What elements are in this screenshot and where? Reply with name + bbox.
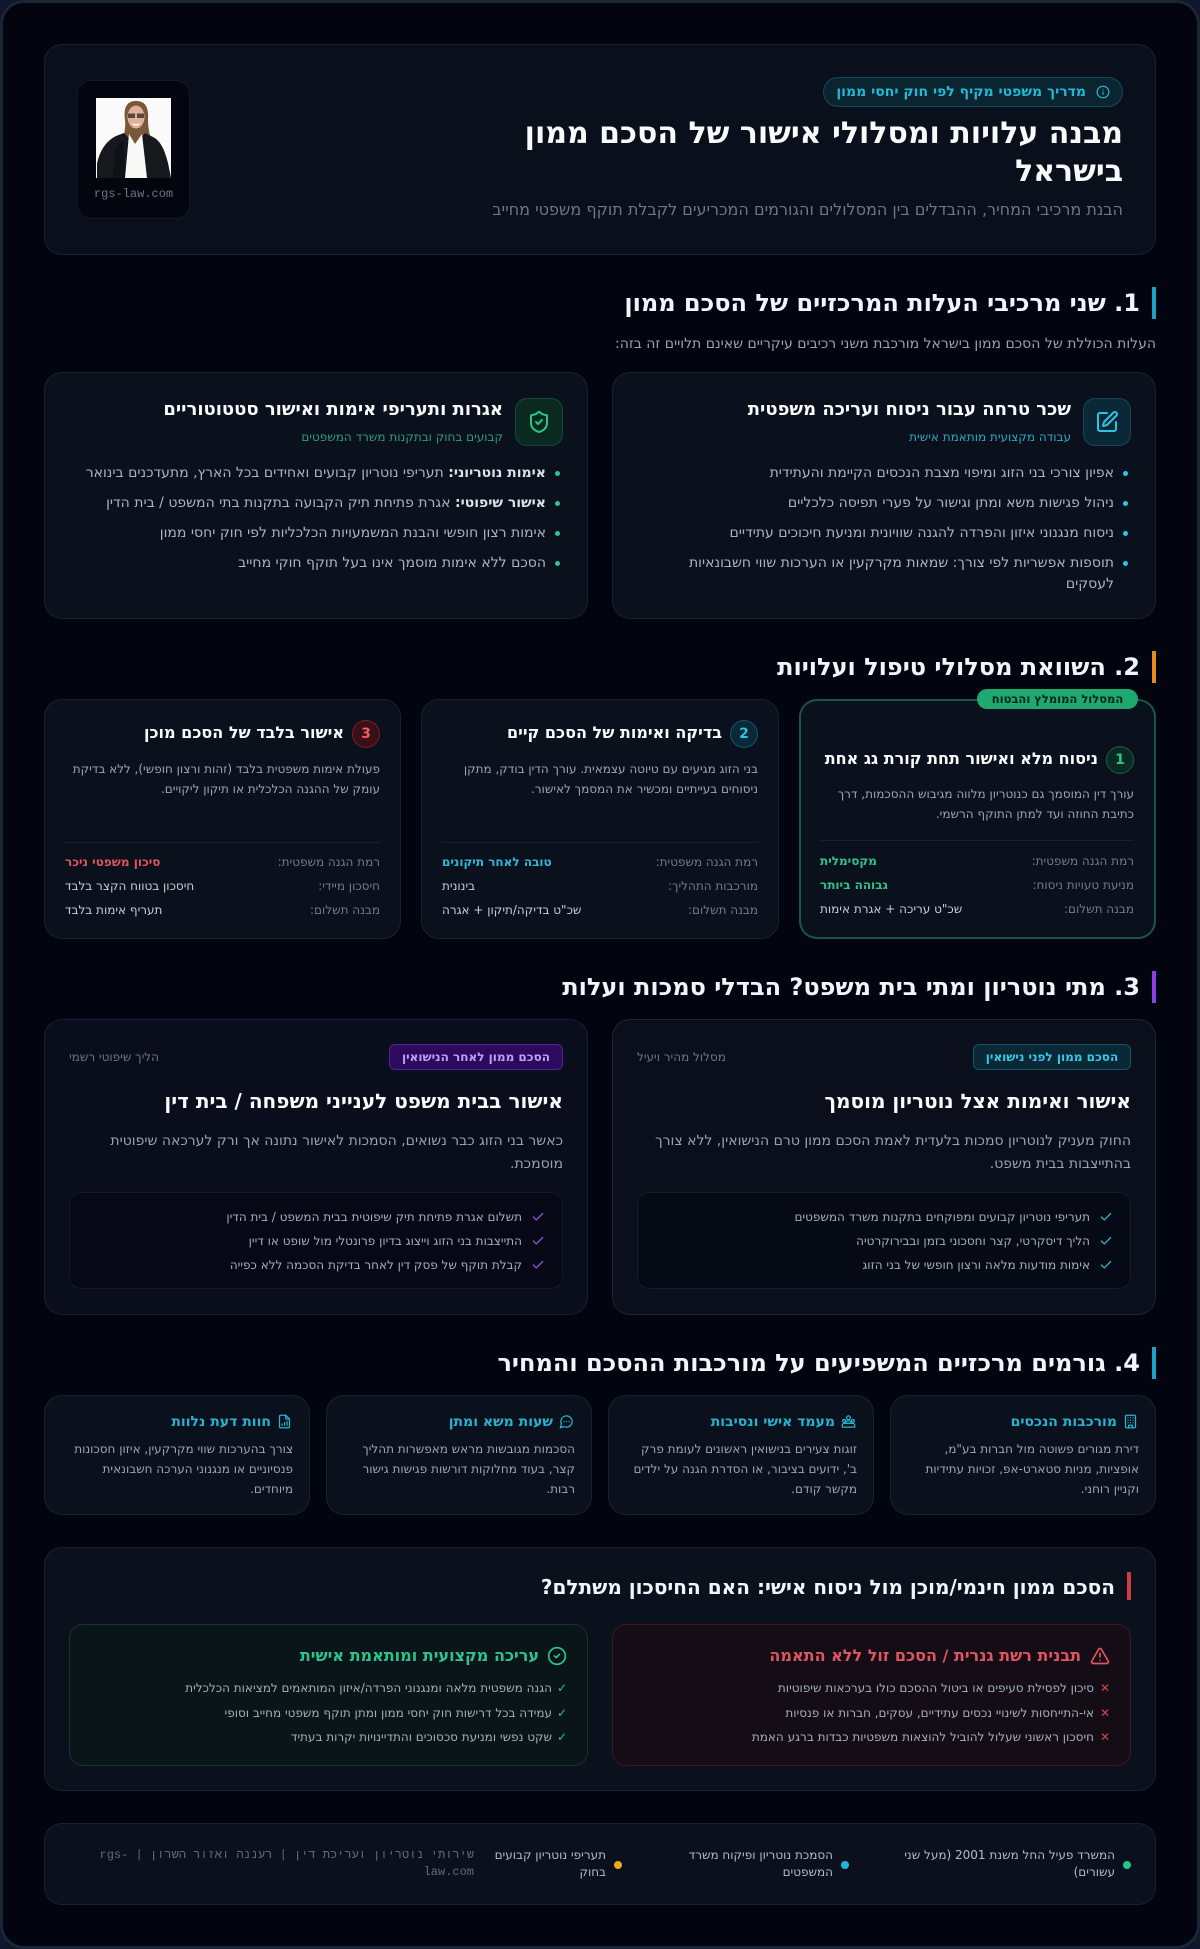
factor text: וקניין רוחני. (1081, 1482, 1139, 1496)
panel: footer (44, 1823, 1156, 1905)
footer item: fixed fees: תעריפי נוטריון קבועים (495, 1848, 606, 1862)
bullet list: ניהול פגישות משא ומתן וגישור על פערי תפיסה כלכליים (788, 495, 1114, 511)
tag: הסכם ממון לאחר הנישואין (402, 1050, 550, 1064)
factor text: רבות. (546, 1482, 575, 1496)
divider row data (820, 840, 1134, 916)
list: חיסכון ראשוני שעלול להוביל להוצאות משפטיות כבדות ברגע האמת (752, 1730, 1094, 1744)
route description (72, 762, 380, 796)
route description: פעולת אימות משפטית בלבד (זהות ורצון חופשי), ללא בדיקת (73, 762, 380, 776)
card title: תבנית רשת גנרית / הסכם זול ללא התאמה (769, 1646, 1081, 1665)
list: ✕ (1100, 1730, 1110, 1744)
list (752, 1681, 1110, 1744)
route description: ניסוחים בעייתיים ומכשיר את המסמך לאישור. (531, 782, 758, 796)
factor text: ב', ידועים בציבור, או הסדרת הגנה על ילדים (633, 1462, 857, 1476)
checklist box: התייצבות בני הזוג וייצוג בדיון פרונטלי מול שופט או דיין (249, 1234, 522, 1248)
list (185, 1681, 567, 1744)
panel: factor opinions (44, 1395, 310, 1515)
checklist box: אימות מודעות מלאה ורצון חופשי של בני הזוג (862, 1258, 1090, 1272)
list: אי-התייחסות לשינויי נכסים עתידיים, עסקים, חברות או פנסיות (785, 1706, 1094, 1720)
number 2 (730, 720, 758, 748)
heading: section 3 (562, 971, 1156, 1003)
bullet list: לעסקים (1066, 576, 1114, 592)
footer item: fixed fees: בחוק (579, 1865, 606, 1879)
list: ✓ (557, 1681, 567, 1695)
heading text: 3. מתי נוטריון ומתי בית משפט? הבדלי סמכות ועלות (562, 973, 1140, 1001)
icon: info (1096, 86, 1110, 98)
route description: עומק של ההגנה הכלכלית או תיקון ליקויים. (161, 782, 380, 796)
checklist box: תשלום אגרת פתיחת תיק שיפוטית בבית המשפט / בית הדין (226, 1210, 522, 1224)
factor text (362, 1442, 575, 1496)
list: ✕ (1100, 1706, 1110, 1720)
footer services text: שירותי נוטריון ועריכת דין | רעננה ואזור השרון | -rgs (100, 1848, 474, 1862)
panel: route 1 recommended (799, 699, 1156, 939)
divider row data: שכ"ט עריכה + אגרת אימות (820, 902, 962, 916)
bullet list (689, 465, 1128, 592)
row data: מבנה תשלום: (310, 903, 380, 917)
footer item: licensing (689, 1848, 849, 1879)
factor text: צורך בהערכות שווי מקרקעין, איזון חסכונות (74, 1442, 293, 1456)
accent bar (1127, 1572, 1131, 1600)
bullet list: הסכם ללא אימות מוסמך אינו בעל תוקף חוקי מחייב (238, 555, 546, 571)
list: ✓ (557, 1730, 567, 1744)
icon: warning (1090, 1648, 1110, 1664)
row data: תעריף אימות בלבד (65, 903, 162, 917)
tag (973, 1044, 1131, 1070)
footer item: experience (904, 1848, 1131, 1879)
checklist box (69, 1192, 563, 1289)
factor text: הסכמות מגובשות מראש מאפשרות תהליך (362, 1442, 575, 1456)
row data: מורכבות התהליך: (668, 879, 758, 893)
heading: section 4 (497, 1347, 1156, 1379)
number 1: 1 (1115, 752, 1125, 768)
bullet list: אישור שיפוטי: אגרת פתיחת תיק הקבועה בתקנות בתי המשפט / בית הדין (106, 495, 546, 511)
row data (65, 842, 380, 917)
row data (442, 842, 758, 917)
panel: court (44, 1019, 588, 1315)
badge: recommended (977, 689, 1138, 709)
description (110, 1133, 563, 1172)
factor text (926, 1442, 1139, 1496)
factor text: דירת מגורים פשוטה מול חברות בע"מ, (944, 1442, 1139, 1456)
description: מוסמכת. (510, 1156, 563, 1172)
list: ✓ (557, 1706, 567, 1720)
subtitle: הבנת מרכיבי המחיר, ההבדלים בין המסלולים והגורמים המכריעים לקבלת תוקף משפטי מחייב (492, 200, 1123, 219)
panel: portrait card (77, 80, 190, 219)
icon: edit (1083, 398, 1131, 446)
panel: route 2 (421, 699, 779, 939)
number 2: 2 (739, 726, 749, 742)
bullet list: אימות נוטריוני: תעריפי נוטריון קבועים ואחידים בכל הארץ, מתעדכנים בינואר (86, 465, 546, 481)
title: אישור ואימות אצל נוטריון מוסמך (824, 1089, 1131, 1113)
badge: guide label (823, 77, 1123, 107)
footer services text: law.com (424, 1865, 474, 1879)
list: שקט נפשי ומניעת סכסוכים והתדיינויות יקרות בעתיד (291, 1730, 552, 1744)
route title: אישור בלבד של הסכם מוכן (144, 723, 344, 742)
section 1 intro: העלות הכוללת של הסכם ממון בישראל מורכבת משני רכיבים עיקריים שאינם תלויים זה בזה: (615, 336, 1156, 352)
panel heading: הסכם ממון חינמי/מוכן מול ניסוח אישי: האם החיסכון משתלם? (541, 1575, 1115, 1599)
panel: free template vs personal drafting (44, 1547, 1156, 1791)
description: החוק מעניק לנוטריון סמכות בלעדית לאמת הסכם ממון טרם הנישואין, ללא צורך (655, 1133, 1131, 1149)
factor text: זוגות צעירים בנישואין ראשונים לעומת פרק (641, 1442, 857, 1456)
bullet list (86, 465, 560, 571)
icon: building (1124, 1414, 1136, 1428)
description: כאשר בני הזוג כבר נשואים, הסמכות לאישור נתונה אך ורק לערכאה שיפוטית (110, 1133, 563, 1149)
badge text: מדריך משפטי מקיף לפי חוק יחסי ממון (836, 84, 1086, 100)
panel: factor assets (890, 1395, 1156, 1515)
card: professional drafting (69, 1624, 588, 1766)
route description: כתיבת החוזה ועד למתן התוקף הרשמי. (936, 807, 1134, 821)
panel: route 3 (44, 699, 401, 939)
route description (838, 787, 1134, 821)
side note: מסלול מהיר ויעיל (637, 1050, 726, 1064)
checklist box: תעריפי נוטריון קבועים ומפוקחים בתקנות משרד המשפטים (794, 1210, 1090, 1224)
card title: עריכה מקצועית ומותאמת אישית (300, 1646, 539, 1665)
heading: section 1 (624, 287, 1156, 319)
footer item: licensing: המשפטים (783, 1865, 833, 1879)
route title: ניסוח מלא ואישור תחת קורת גג אחת (825, 749, 1098, 768)
heading text: 2. השוואת מסלולי טיפול ועלויות (777, 653, 1140, 681)
tag: הסכם ממון לפני נישואין (986, 1050, 1118, 1064)
heading text: 4. גורמים מרכזיים המשפיעים על מורכבות ההסכם והמחיר (497, 1349, 1140, 1377)
footer item: licensing: הסמכת נוטריון ופיקוח משרד (689, 1848, 833, 1862)
icon: check circle (548, 1646, 566, 1666)
panel: hero header (44, 44, 1156, 255)
route description (464, 762, 758, 796)
bullet list: אפיון צורכי בני הזוג ומיפוי מצבת הנכסים הקיימת והעתידית (770, 465, 1114, 481)
row data: רמת הגנה משפטית: (656, 855, 758, 869)
divider row data: מניעת טעויות ניסוח: (1032, 878, 1134, 892)
row data: בינונית (442, 879, 475, 893)
bullet list: תוספות אפשריות לפי צורך: שמאות מקרקעין או הערכות שווי חשבונאיות (689, 555, 1114, 571)
factor text: מקשר קודם. (791, 1482, 857, 1496)
factor title: שעות משא ומתן (449, 1414, 553, 1430)
panel: factor status (608, 1395, 874, 1515)
footer services text (100, 1848, 474, 1879)
title: בישראל (1015, 154, 1123, 189)
card subtitle: עבודה מקצועית מותאמת אישית (909, 430, 1071, 444)
checklist box: קבלת תוקף של פסק דין לאחר בדיקת הסכמה ללא כפייה (230, 1258, 522, 1272)
factor text: קצר, בעוד מחלוקות דורשות פגישות גישור (362, 1462, 575, 1476)
site label: rgs-law.com (94, 187, 173, 201)
factor text: מיוחדים. (250, 1482, 293, 1496)
card title: אגרות ותעריפי אימות ואישור סטטוטוריים (163, 399, 503, 420)
factor text (633, 1442, 857, 1496)
panel: attorney fee (612, 372, 1156, 619)
accent bar (1152, 287, 1156, 319)
divider row data: מקסימלית (820, 854, 877, 868)
checklist box (637, 1192, 1131, 1289)
checklist box: הליך דיסקרטי, קצר וחסכוני בזמן ובבירוקרטיה (856, 1234, 1090, 1248)
list: עמידה בכל דרישות חוק יחסי ממון ומתן תוקף משפטי מחייב וסופי (225, 1706, 552, 1720)
bullet list: ניסוח מנגנוני איזון והפרדה להגנה שוויונית ומניעת חיכוכים עתידיים (730, 525, 1114, 541)
side note: הליך שיפוטי רשמי (69, 1050, 159, 1064)
title: אישור בבית משפט לענייני משפחה / בית דין (164, 1089, 563, 1113)
card: generic template (612, 1624, 1131, 1766)
card title: שכר טרחה עבור ניסוח ועריכה משפטית (748, 399, 1071, 420)
footer item: experience: המשרד פעיל החל משנת 2001 (מעל שני (904, 1848, 1115, 1862)
factor title: מורכבות הנכסים (1011, 1414, 1117, 1430)
row data: טובה לאחר תיקונים (442, 855, 552, 869)
card subtitle: קבועים בחוק ובתקנות משרד המשפטים (301, 430, 503, 444)
heading text: 1. שני מרכיבי העלות המרכזיים של הסכם ממון (624, 289, 1140, 317)
row data: חיסכון בטווח הקצר בלבד (65, 879, 194, 893)
panel: statutory fees (44, 372, 588, 619)
icon: shield (515, 398, 563, 446)
list: סיכון לפסילת סעיפים או ביטול ההסכם כולו בערכאות שיפוטיות (778, 1681, 1094, 1695)
number 3: 3 (361, 726, 371, 742)
tag (389, 1044, 563, 1070)
list: הגנה משפטית מלאה ומנגנוני הפרדה/איזון המותאמים למציאות הכלכלית (185, 1681, 552, 1695)
divider row data: מבנה תשלום: (1064, 902, 1134, 916)
row data: רמת הגנה משפטית: (278, 855, 380, 869)
route title: בדיקה ואימות של הסכם קיים (507, 723, 722, 742)
factor text (74, 1442, 293, 1496)
accent bar (1152, 1347, 1156, 1379)
row data: שכ"ט בדיקה/תיקון + אגרה (442, 903, 581, 917)
panel: notary (612, 1019, 1156, 1315)
bullet list: אימות רצון חופשי והבנת המשמעויות הכלכליות לפי חוק יחסי ממון (160, 525, 546, 541)
number 1 (1106, 746, 1134, 774)
icon: chat (560, 1415, 573, 1428)
row data: סיכון משפטי ניכר (65, 855, 160, 869)
footer item: fixed fees (495, 1848, 622, 1879)
title: מבנה עלויות ומסלולי אישור של הסכם ממון (525, 116, 1123, 151)
row data: מבנה תשלום: (688, 903, 758, 917)
route description: עורך דין המוסמך גם כנוטריון מלווה מגיבוש ההסכמות, דרך (838, 787, 1134, 801)
description (655, 1133, 1131, 1172)
list: ✕ (1100, 1681, 1110, 1695)
icon: document chart (278, 1414, 290, 1428)
description: בהתייצבות בבית משפט. (990, 1156, 1131, 1172)
row data: חיסכון מיידי: (318, 879, 380, 893)
accent bar (1152, 971, 1156, 1003)
factor title: מעמד אישי ונסיבות (711, 1414, 835, 1430)
footer item: experience: עשורים) (1074, 1865, 1115, 1879)
divider row data: רמת הגנה משפטית: (1032, 854, 1134, 868)
accent bar (1152, 651, 1156, 683)
icon: people (842, 1415, 856, 1428)
badge: recommended: המסלול המומלץ והבטוח (992, 692, 1123, 706)
route description: בני הזוג מגיעים עם טיוטה עצמאית. עורך הדין בודק, מתקן (464, 762, 758, 776)
factor text: פנסיוניים או מנגנוני הערכה חשבונאית (103, 1462, 293, 1476)
divider row data: גבוהה ביותר (820, 878, 888, 892)
title (525, 116, 1123, 189)
heading: section 2 (777, 651, 1156, 683)
icon: portrait photo (96, 98, 171, 178)
number 3 (352, 720, 380, 748)
factor text: אופציות, מניות סטארט-אפ, זכויות עתידיות (926, 1462, 1139, 1476)
factor title: חוות דעת נלוות (171, 1414, 271, 1430)
panel: factor negotiation (326, 1395, 592, 1515)
